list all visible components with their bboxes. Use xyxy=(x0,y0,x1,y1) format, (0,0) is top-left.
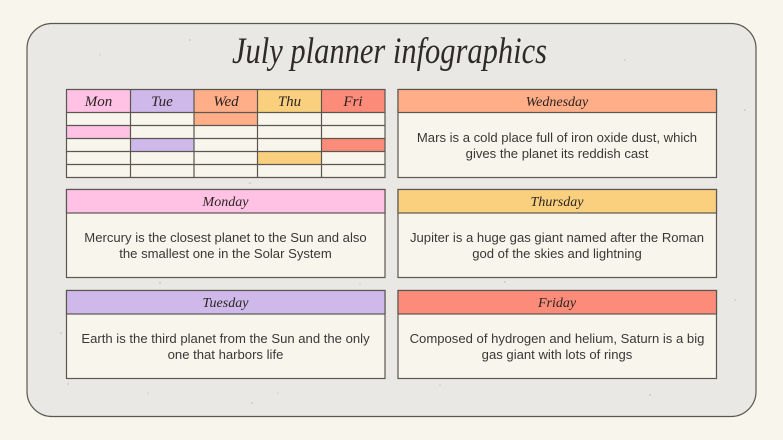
highlighted cell: Fri xyxy=(322,138,385,152)
heading: Wednesday: Wednesday xyxy=(526,95,589,110)
text: Monday: the smallest one in the Solar System xyxy=(119,246,332,261)
highlighted cell: Thu xyxy=(258,152,322,164)
highlighted cell: Tue xyxy=(130,138,194,152)
header: Fri: Fri xyxy=(342,94,363,110)
text: Thursday: Jupiter is a huge gas giant named after the Roman xyxy=(410,230,704,245)
header: Tue: Tue xyxy=(151,94,173,110)
heading: Tuesday: Tuesday xyxy=(203,296,249,311)
header: Mon xyxy=(66,90,130,112)
highlighted cell: Mon xyxy=(66,126,130,138)
panel: Wednesday xyxy=(398,90,716,178)
header: Tue xyxy=(130,90,194,112)
header: Thu: Thu xyxy=(278,94,301,110)
header: Wed: Wed xyxy=(213,94,239,110)
panel: Tuesday xyxy=(66,290,385,378)
text: Thursday: god of the skies and lightning xyxy=(472,246,642,261)
text: Tuesday: one that harbors life xyxy=(168,347,283,362)
header: Wed xyxy=(194,90,258,112)
planner table xyxy=(66,90,385,178)
heading: Monday: Monday xyxy=(202,195,249,210)
heading: Friday: Friday xyxy=(537,296,577,311)
text: Friday: gas giant with lots of rings xyxy=(482,347,633,362)
text: Wednesday: gives the planet its reddish cast xyxy=(466,146,649,161)
panel: Monday xyxy=(66,190,385,278)
highlighted cell: Wed xyxy=(194,112,258,126)
panel: Friday xyxy=(398,290,716,378)
header: Fri xyxy=(322,90,385,112)
header: Mon: Mon xyxy=(84,94,112,110)
text: Tuesday: Earth is the third planet from the Sun and the only xyxy=(81,331,370,346)
header: Thu xyxy=(258,90,322,112)
panel: Thursday xyxy=(398,190,716,278)
title: July planner infographics xyxy=(232,31,547,72)
text: Wednesday: Mars is a cold place full of iron oxide dust, which xyxy=(417,130,697,145)
heading: Thursday: Thursday xyxy=(531,195,584,210)
text: Friday: Composed of hydrogen and helium, Saturn is a big xyxy=(410,331,704,346)
text: Monday: Mercury is the closest planet to the Sun and also xyxy=(84,230,367,245)
